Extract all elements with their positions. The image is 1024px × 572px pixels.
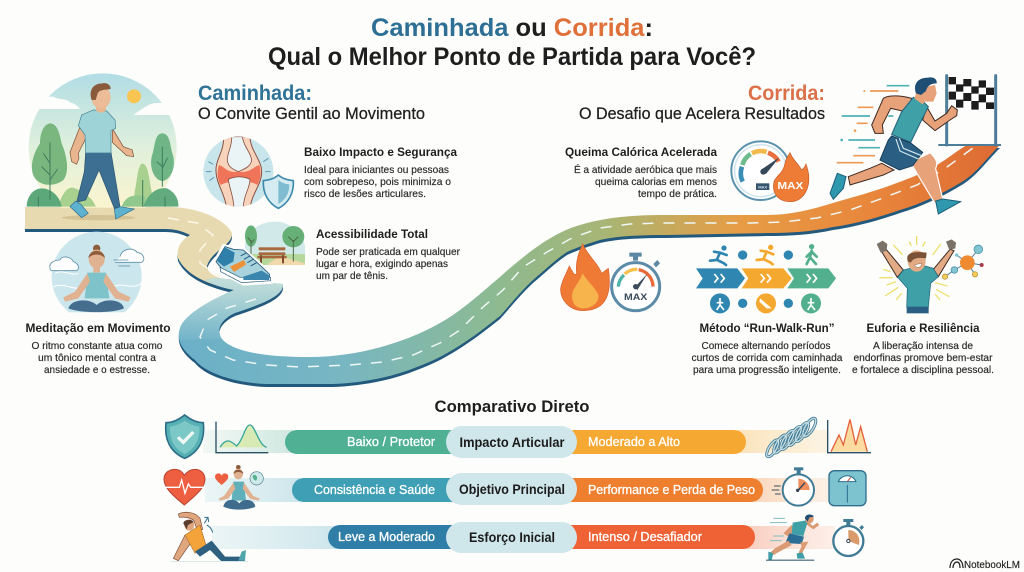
illustration: euphoric person with endorphin molecule [877,236,984,313]
text: Queima Calórica Acelerada: Queima Calórica Acelerada [565,145,717,159]
pill: Performance e Perda de Peso [560,478,763,502]
text: Meditação em Movimento [26,321,170,376]
pill: Consistência e Saúde: Consistência e Saúde [314,483,435,497]
text: Acessibilidade Total [316,227,460,282]
illustration: woman meditating [43,232,150,327]
text: Meditação em Movimento: um tônico mental contra a [38,352,156,364]
section heading: Corrida: O Desafio que Acelera Resultados [579,105,825,123]
illustration: sprinter [766,515,819,561]
text: Baixo Impacto e Segurança: com sobrepeso, pois minimiza o [304,176,451,188]
icon: meditator with small heart and globe [215,465,263,510]
illustration: man walking in park [25,72,185,220]
text: Meditação em Movimento: O ritmo constante atua como [32,340,163,352]
pill: Baixo / Protetor [285,430,460,454]
winding road from walking to running [25,145,1000,387]
text: Euforia e Resiliência: endorfinas promove bem-estar [854,352,993,364]
comparison row: Objetivo Principal [205,473,833,505]
text: Queima Calórica Acelerada: queima calorias em menos [595,176,717,188]
text: Método Run-Walk-Run [692,321,843,376]
pill: Intenso / Desafiador [560,525,755,549]
pill: Intenso / Desafiador: Intenso / Desafiador [588,530,702,544]
arrow: blue chevron [696,268,745,288]
comparison row: Impacto Articular [203,426,828,458]
label: Impacto Articular: Impacto Articular [460,435,565,450]
icon: knee joint and shield [203,137,293,208]
pill: Leve a Moderado [328,525,460,549]
text: Acessibilidade Total: Pode ser praticada em qualquer [316,246,460,258]
icon: checkered finish flag [938,76,1001,146]
text: Método Run-Walk-Run: para uma progressão inteligente. [693,364,841,376]
label: Objetivo Principal: Objetivo Principal [459,482,565,497]
label: Esforço Inicial: Esforço Inicial [469,530,555,545]
label: Esforço Inicial [446,522,577,553]
text: Baixo Impacto e Segurança: risco de lesões articulares. [304,188,426,200]
icon: flame and stopwatch: MAX [624,292,647,302]
title: Caminhada ou Corrida: [371,14,653,42]
text: Método Run-Walk-Run: curtos de corrida com caminhada [692,352,843,364]
text: Acessibilidade Total: um par de tênis. [316,270,388,282]
label: Impacto Articular [446,426,577,458]
chart: high impact peaks [828,419,871,453]
text: Euforia e Resiliência: Euforia e Resiliência [866,321,980,335]
title [268,14,756,71]
text: Euforia e Resiliência [852,321,994,376]
pill: Leve a Moderado: Leve a Moderado [338,530,435,544]
illustration: person stretching on floor [170,512,248,562]
text: Euforia e Resiliência: A liberação intensa de [873,340,973,352]
icon: stopwatch [833,519,864,556]
icon: stopwatch with speed lines [772,467,814,506]
icon: speed gauge with MAX flame [731,141,809,202]
heading: Comparativo Direto: Comparativo Direto [434,398,590,416]
pill: Baixo / Protetor: Baixo / Protetor [347,435,435,449]
arrow: orange chevron [742,268,792,288]
text: Método Run-Walk-Run: Comece alternando períodos [702,340,830,352]
arrow: green chevron [787,268,836,288]
icon: protective shield [166,415,204,458]
section heading: Corrida: Corrida: [748,82,825,105]
illustration: runner [830,77,961,214]
text: Acessibilidade Total: lugar e hora, exigindo apenas [316,258,448,270]
icon: figures and dots above [710,244,817,265]
icon: speed gauge with MAX flame: MAX [758,184,767,189]
chart: gentle impact curve [216,422,268,453]
pill: Performance e Perda de Peso: Performance e Perda de Peso [588,483,755,497]
section heading: Corrida [579,82,825,123]
icon: spring [764,416,818,458]
pill: Moderado a Alto: Moderado a Alto [588,435,680,449]
chevron marks [714,274,817,283]
text: Método Run-Walk-Run: Método “Run-Walk-Run” [700,321,834,335]
text: Queima Calórica Acelerada [565,145,717,200]
logo: NotebookLM: NotebookLM [964,559,1020,571]
icon: speed gauge with MAX flame: MAX [777,181,803,192]
icon: heart with pulse [164,469,205,505]
text: Baixo Impacto e Segurança: Ideal para iniciantes ou pessoas [304,164,449,176]
text: Queima Calórica Acelerada: tempo de prática. [638,188,717,200]
title: Qual o Melhor Ponto de Partida para Você? [268,43,756,71]
diagram: Run-Walk-Run chevrons [696,244,836,313]
text: Acessibilidade Total: Acessibilidade Total [316,227,428,241]
section heading: Caminhada: Caminhada: [198,82,312,105]
text: Meditação em Movimento: ansiedade e o estresse. [44,364,150,376]
text: Euforia e Resiliência: e fortalece a disciplina pessoal. [852,364,994,376]
icon: weighing scale [829,471,866,506]
icon: flame and stopwatch [561,244,660,311]
comparison row: Esforço Inicial [212,522,835,553]
text: Meditação em Movimento: Meditação em Movimento [26,321,170,335]
icon: park scene with sneaker [214,220,307,285]
icon: circles below [710,293,821,313]
text: Queima Calórica Acelerada: É a atividade aeróbica que mais [574,163,717,176]
text: Baixo Impacto e Segurança [304,145,457,200]
pill: Moderado a Alto [560,430,746,454]
section heading: Caminhada: O Convite Gentil ao Movimento [198,105,425,123]
text: Baixo Impacto e Segurança: Baixo Impacto e Segurança [304,145,457,159]
pill: Consistência e Saúde [292,478,460,502]
section heading: Caminhada [198,82,425,123]
label: Objetivo Principal [446,473,577,505]
